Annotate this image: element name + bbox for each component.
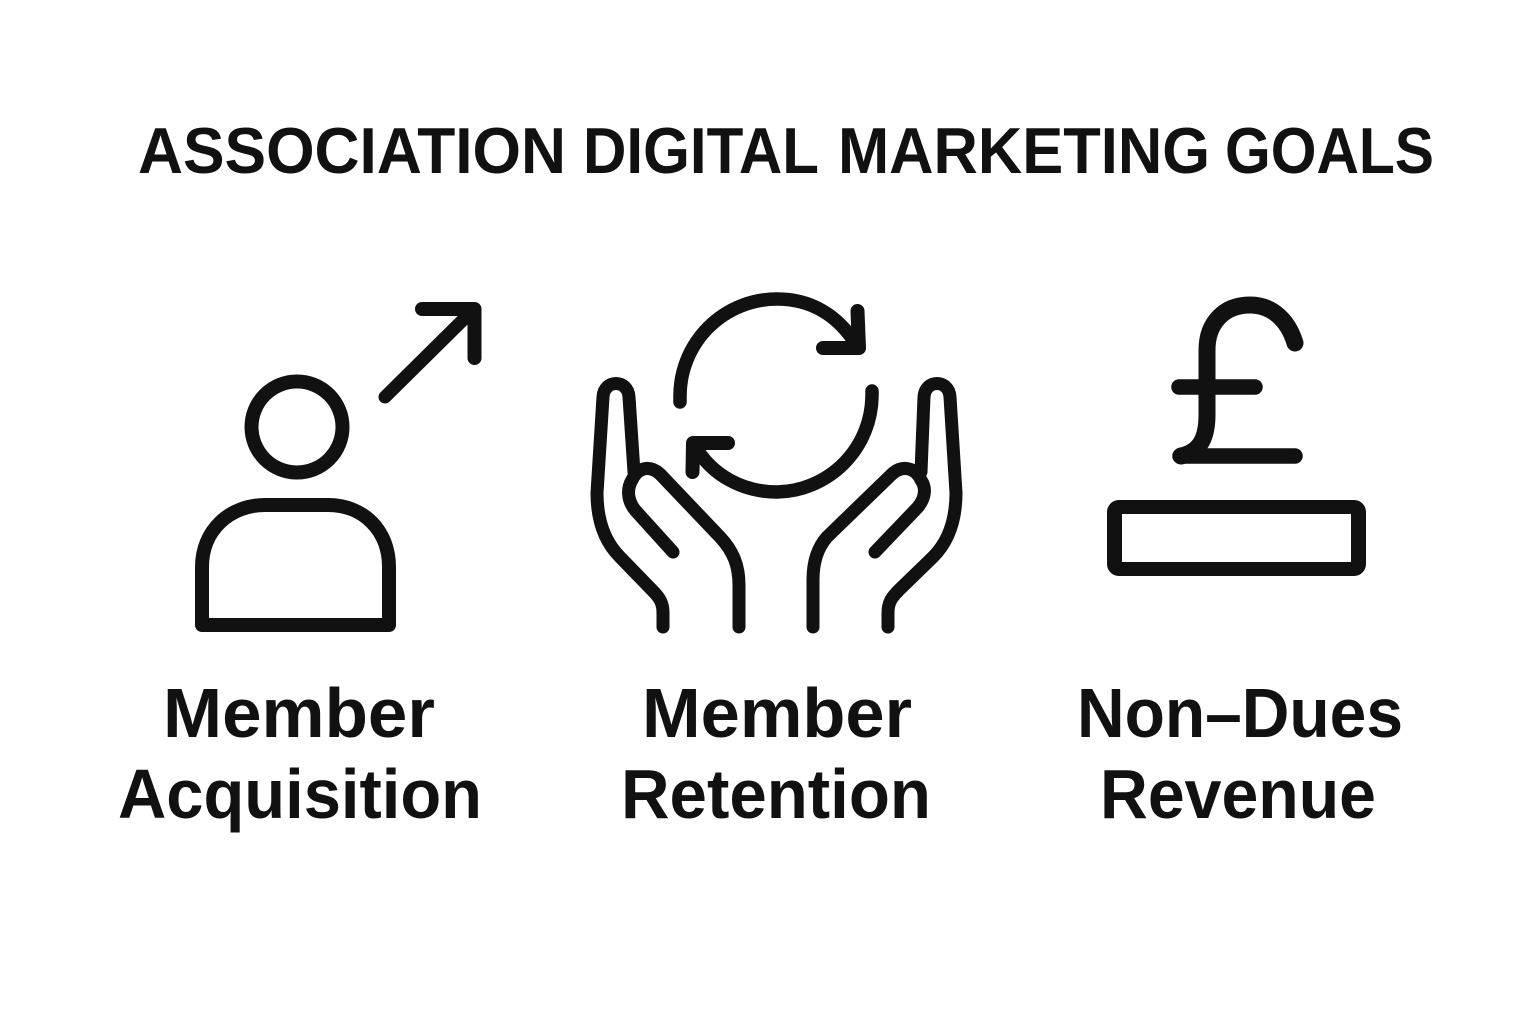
label: revenue: Revenue (1100, 755, 1376, 833)
panel: member acquisition (118, 309, 482, 833)
icon: pound sign above bar (1107, 305, 1366, 576)
label: acquisition: Acquisition (118, 755, 482, 833)
title: GOALS (1225, 114, 1434, 187)
title (138, 114, 1434, 187)
title: DIGITAL (583, 114, 819, 187)
label: member: Member (642, 674, 912, 752)
title: ASSOCIATION (138, 114, 566, 187)
icon: hands with cycle arrows (597, 299, 956, 627)
label: member: Member (163, 674, 435, 752)
label: non-dues: Non–Dues (1077, 674, 1403, 752)
title: MARKETING (838, 114, 1210, 187)
panel: non-dues revenue (1077, 305, 1403, 833)
panel: member retention (597, 299, 956, 833)
icon: person with arrow (202, 309, 474, 625)
label: retention: Retention (621, 755, 931, 833)
